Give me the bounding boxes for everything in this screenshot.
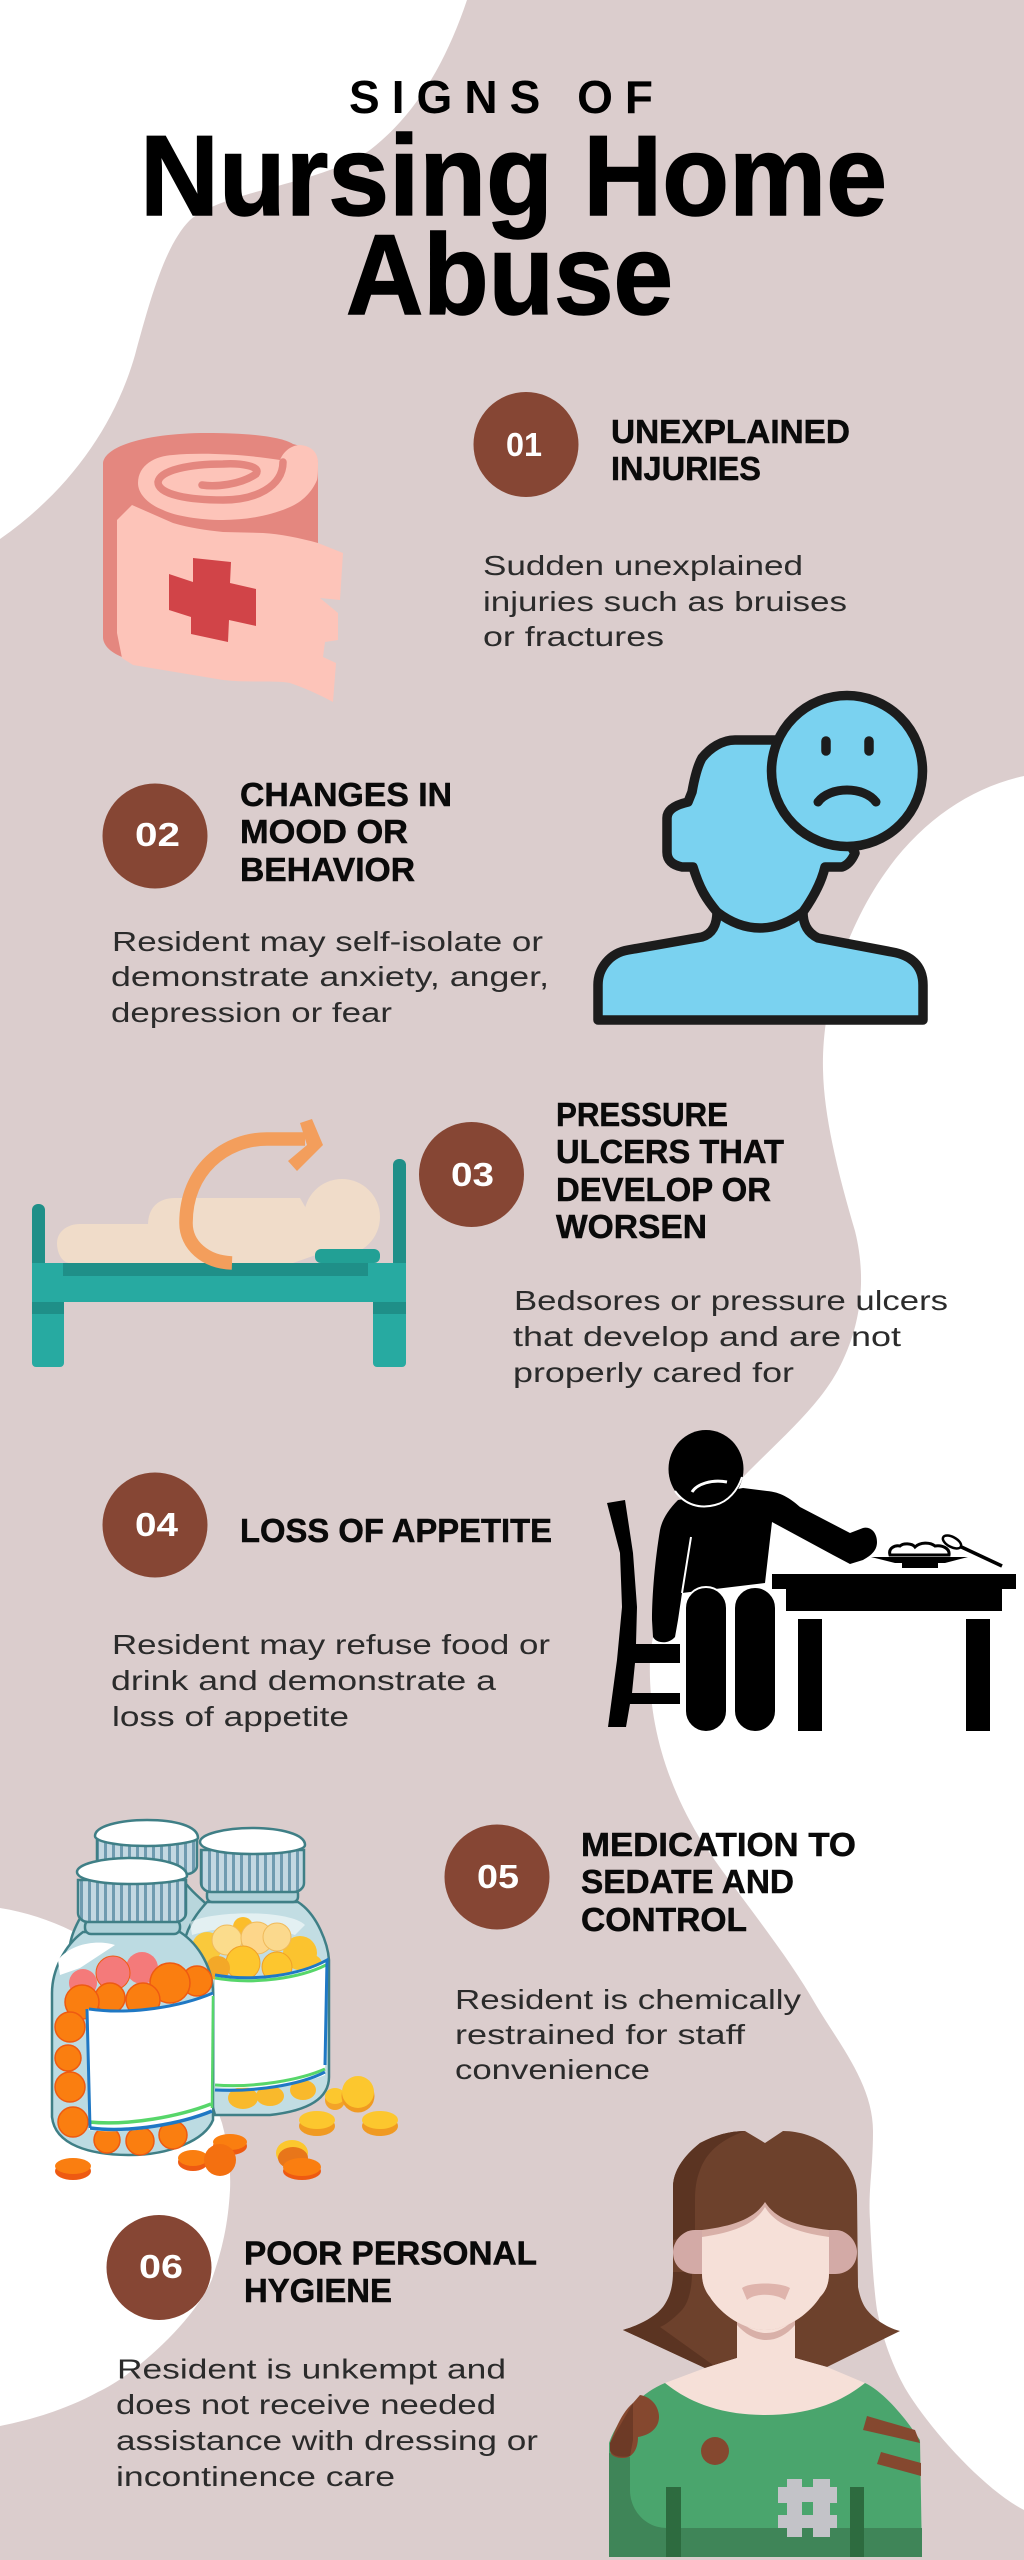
body text 06: does not receive needed [116, 2389, 496, 2420]
heading 03 [556, 1096, 784, 1245]
body text 02: demonstrate anxiety, anger, [111, 961, 549, 992]
step 02 [102, 776, 549, 1028]
heading 06: HYGIENE [244, 2272, 392, 2309]
step 04 [102, 1472, 552, 1732]
front bottle [52, 1858, 213, 2155]
icon: patient on bed with turn arrow [32, 1119, 406, 1367]
number badge 01: 01 [506, 426, 542, 463]
heading 03: PRESSURE [556, 1096, 728, 1133]
title: SIGNS OF [349, 71, 653, 123]
heading 05: SEDATE AND [581, 1863, 794, 1900]
legs [685, 1587, 727, 1732]
step 06 [106, 2215, 538, 2492]
shirt [609, 2383, 922, 2557]
title: Abuse [346, 212, 673, 339]
plate and spoon [890, 1543, 949, 1555]
body text 04: drink and demonstrate a [111, 1665, 497, 1696]
title [140, 71, 887, 339]
body text 05: restrained for staff [455, 2019, 745, 2050]
neck and chest [665, 2310, 865, 2420]
heading 02: CHANGES IN [240, 776, 452, 813]
label [215, 1960, 327, 2088]
label [87, 1993, 213, 2131]
heading 03: WORSEN [556, 1208, 707, 1245]
body text 06: Resident is unkempt and [117, 2354, 506, 2384]
body text 04: Resident may refuse food or [112, 1629, 550, 1660]
head [668, 1430, 744, 1508]
number badge 04 [102, 1472, 208, 1578]
number badge 01 [474, 392, 578, 497]
heading 06 [244, 2234, 537, 2309]
body text 01: or fractures [483, 621, 664, 652]
body text 01 [483, 550, 847, 652]
icon: red cross [169, 558, 256, 642]
title: Nursing Home [140, 113, 887, 240]
number badge 05 [444, 1824, 550, 1930]
step 01 [474, 392, 850, 652]
icon: figure refusing food at table [607, 1430, 1016, 1732]
body text 02: depression or fear [111, 997, 392, 1028]
body text 03: Bedsores or pressure ulcers [514, 1285, 948, 1316]
number badge 03 [419, 1122, 524, 1227]
icon: bandage roll [103, 433, 343, 702]
heading 04: LOSS OF APPETITE [240, 1512, 552, 1549]
body text 04: loss of appetite [112, 1701, 349, 1732]
heading 02: MOOD OR [240, 813, 408, 850]
body text 01: Sudden unexplained [483, 550, 803, 581]
arrow: turn patient [186, 1119, 323, 1263]
heading 05: CONTROL [581, 1901, 747, 1938]
back bottle [70, 1820, 210, 1945]
heading 01 [611, 413, 850, 487]
heading 02 [240, 776, 452, 888]
step 03 [419, 1096, 948, 1388]
heading 01: UNEXPLAINED [611, 413, 850, 450]
heading 05: MEDICATION TO [581, 1826, 856, 1863]
patch [778, 2479, 837, 2537]
body text 02: Resident may self-isolate or [112, 926, 543, 957]
number badge 02: 02 [135, 816, 180, 853]
number badge 06 [106, 2215, 212, 2320]
heading 03: DEVELOP OR [556, 1171, 771, 1208]
stains and tears [610, 2395, 659, 2458]
body text 03: that develop and are not [513, 1321, 901, 1352]
face [702, 2202, 829, 2330]
mouth [742, 2284, 790, 2300]
ears [673, 2230, 702, 2274]
heading 03: ULCERS THAT [556, 1133, 784, 1170]
number badge 02 [102, 784, 208, 888]
body text 06 [116, 2354, 538, 2492]
heading 06: POOR PERSONAL [244, 2234, 537, 2272]
number badge 06: 06 [139, 2248, 183, 2285]
table [772, 1574, 1016, 1611]
loose pills [55, 2076, 398, 2180]
right bottle [183, 1828, 329, 2115]
icon: unkempt woman [609, 2131, 922, 2557]
number badge 03: 03 [451, 1156, 494, 1193]
body text 03 [513, 1285, 948, 1388]
icon: pill bottles [52, 1820, 398, 2180]
torso and arm [652, 1488, 877, 1642]
heading 05 [581, 1826, 856, 1938]
number badge 05: 05 [477, 1858, 519, 1895]
body text 05 [455, 1984, 801, 2085]
body text 02 [111, 926, 549, 1028]
body text 01: injuries such as bruises [483, 586, 847, 617]
number badge 04: 04 [135, 1506, 179, 1543]
body text 03: properly cared for [513, 1357, 794, 1388]
body text 05: Resident is chemically [455, 1984, 801, 2015]
heading 01: INJURIES [611, 450, 761, 487]
step 05 [444, 1824, 856, 2085]
hair [623, 2131, 900, 2368]
chair [607, 1500, 680, 1727]
body text 06: incontinence care [116, 2461, 395, 2492]
heading 02: BEHAVIOR [240, 851, 415, 888]
icon: sad head with mask [598, 696, 923, 1020]
body text 04 [111, 1629, 550, 1732]
body text 06: assistance with dressing or [116, 2425, 538, 2456]
body text 05: convenience [455, 2054, 650, 2085]
